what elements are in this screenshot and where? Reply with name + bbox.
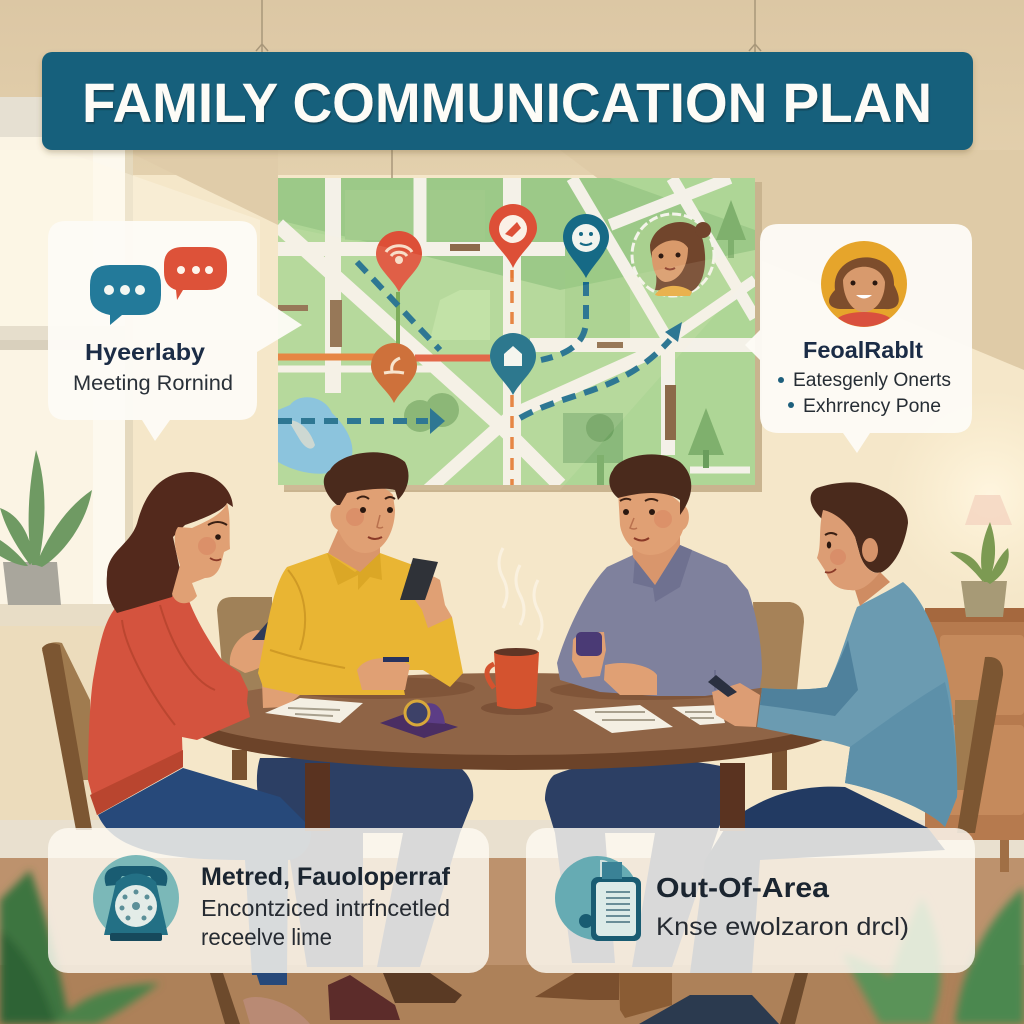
pin: teal marker	[563, 214, 609, 278]
text: meeting: Meeting Rornind	[73, 372, 233, 395]
icon: chat bubbles	[90, 247, 227, 325]
map roads	[278, 178, 755, 490]
man in grey trousers	[545, 760, 745, 967]
purple kit	[380, 701, 458, 738]
table	[192, 673, 838, 831]
person: man in yellow	[258, 452, 463, 695]
pin: teal home	[490, 333, 536, 395]
heading: contact: FeoalRablt	[803, 337, 923, 363]
blue routes	[278, 262, 670, 421]
foreground leaves	[0, 870, 1024, 1024]
card: meeting time	[48, 828, 489, 973]
icon: red mug	[481, 648, 553, 715]
steam	[499, 548, 542, 640]
icon: radio device	[555, 856, 641, 941]
hanging wires	[256, 0, 761, 178]
window plant	[0, 450, 92, 605]
right cabinet and plant	[925, 522, 1024, 872]
table items	[265, 548, 725, 738]
legs and shoes	[98, 758, 945, 1024]
text: meeting time: Encontziced intrfncetled	[201, 895, 450, 921]
text: out of area: Knse ewolzaron drcl)	[656, 913, 909, 941]
man in yellow trousers	[257, 758, 473, 967]
text: meeting time	[201, 895, 450, 950]
icon: girl avatar	[821, 241, 907, 327]
pin: orange	[371, 343, 417, 403]
woman jeans	[98, 768, 311, 975]
heading: meeting: Hyeerlaby	[85, 339, 205, 365]
person: man in grey	[557, 454, 762, 696]
pin: red wifi	[376, 231, 422, 292]
bullets: contact: Eatesgenly Onerts	[793, 370, 951, 391]
bullets: contact: Exhrrency Pone	[803, 396, 941, 417]
title banner: FAMILY COMMUNICATION PLAN	[82, 71, 932, 134]
lake	[278, 397, 352, 474]
person: man in blue	[708, 482, 957, 827]
map	[278, 178, 762, 492]
green link	[396, 292, 400, 345]
heading: meeting time: Metred, Fauoloperraf	[201, 863, 451, 891]
person: woman in red	[88, 472, 305, 815]
man in blue trousers	[690, 787, 945, 973]
map street labels	[278, 244, 676, 440]
card: out of area	[526, 828, 975, 973]
map trees	[404, 200, 746, 485]
text: meeting time: receelve lime	[201, 924, 332, 950]
title banner	[42, 52, 973, 150]
bullets: contact	[778, 370, 951, 417]
chairs	[42, 597, 1003, 1024]
orange route	[278, 354, 380, 360]
callout: contact	[745, 224, 972, 453]
icon: rotary phone	[93, 855, 179, 941]
heading: out of area: Out-Of-Area	[656, 872, 829, 903]
map avatar	[632, 214, 714, 296]
light beam	[278, 225, 755, 490]
paper documents	[265, 698, 725, 733]
callout: meeting	[48, 221, 302, 441]
pin: red marker	[489, 204, 537, 268]
